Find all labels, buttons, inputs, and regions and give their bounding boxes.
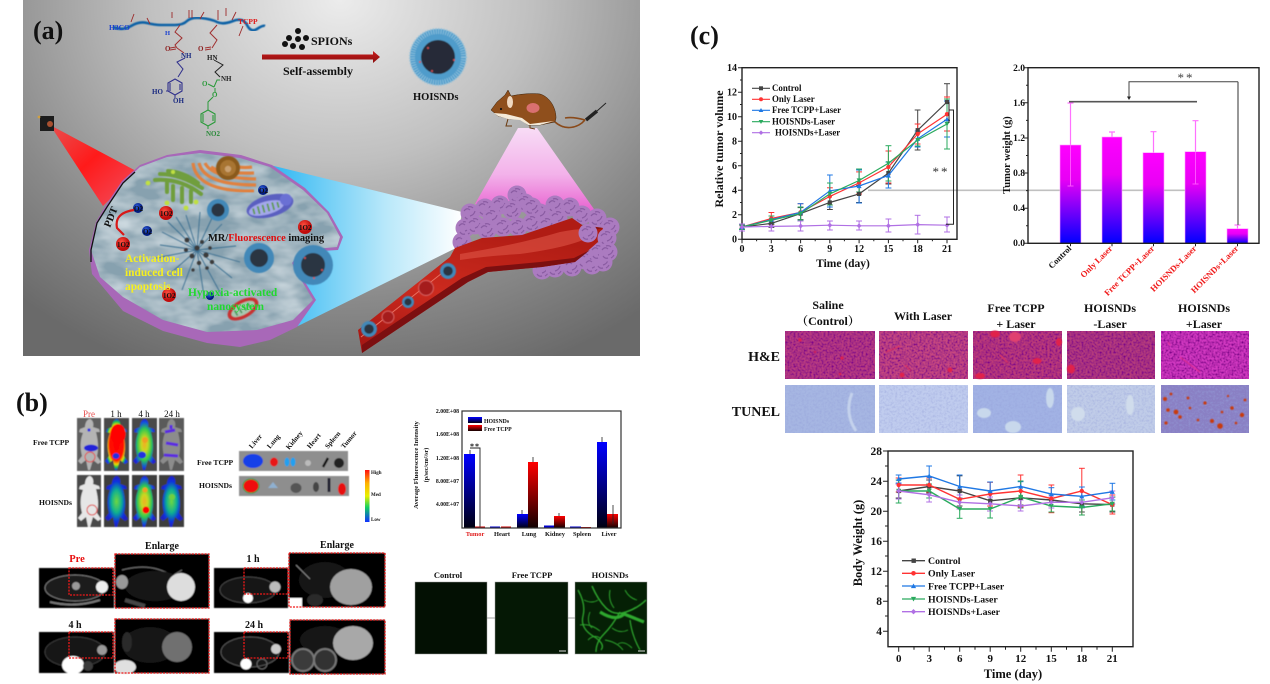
polymer structure: HN: [207, 54, 218, 62]
polymer structure: HO: [152, 88, 163, 96]
hypoxia label: Hypoxia-activated: [188, 287, 278, 299]
x tick labels: Liver: [602, 531, 617, 538]
significance bracket: **: [932, 164, 950, 179]
x axis title: Time (day): [816, 258, 870, 270]
bars: [1060, 137, 1248, 243]
y tick labels: 8: [732, 136, 737, 148]
dashed boxes Pre: [69, 554, 209, 608]
y tick labels: 0.0: [1013, 239, 1025, 249]
y tick labels: [727, 63, 737, 246]
blue light beam: [270, 165, 462, 328]
legend: Free TCPP+Laser: [772, 105, 841, 115]
confocal HOISNDs: [575, 570, 647, 654]
y tick labels: 1.2: [1013, 134, 1025, 144]
line chart: body weight: [851, 446, 1133, 681]
dashed boxes 1 h: [244, 553, 385, 607]
MR images row 1 left: [39, 541, 209, 608]
y tick labels: 10: [727, 112, 737, 123]
panel a background: [23, 0, 640, 356]
y tick labels: 8.00E+07: [436, 479, 459, 485]
icon: SPIONs dots: [282, 28, 309, 50]
legend: [468, 417, 512, 433]
icon: syringe: [586, 103, 606, 120]
dashed boxes 24 h: [244, 620, 385, 674]
x tick labels: Heart: [494, 531, 511, 538]
apoptosis label: [125, 253, 183, 293]
ex vivo label HOISNDs: HOISNDs: [199, 481, 232, 490]
H&amp;E micrographs: [785, 330, 1249, 379]
histology column headings: + Laser: [996, 317, 1036, 331]
bar chart: fluorescence intensity: [413, 409, 621, 538]
polymer structure: NO2: [206, 130, 220, 138]
x tick labels: [466, 531, 617, 538]
label 24 h: 24 h: [245, 620, 263, 631]
organelle: mitochondrion: [244, 189, 296, 223]
label (b): (b): [16, 388, 48, 417]
error bars: [742, 84, 947, 234]
histology column headings: （Control）: [796, 314, 860, 328]
nanoparticle cluster with fibres: [156, 212, 240, 296]
y axis title: (p/sec/cm²/sr): [423, 448, 430, 482]
polymer structure: NH: [181, 52, 192, 60]
histology column headings: [796, 298, 1230, 331]
significance bracket: [470, 442, 480, 527]
line chart: relative tumor volume: [712, 63, 957, 270]
watermark line across charts: [868, 189, 1185, 191]
significance bracket: [932, 102, 954, 224]
MR images row 2 left: [39, 619, 209, 674]
y tick labels: [870, 446, 882, 638]
y tick labels: 24: [870, 476, 882, 488]
histology column headings: HOISNDs: [1178, 301, 1230, 315]
apoptosis label: apoptosis: [125, 281, 171, 293]
legend: HOISNDs-Laser: [772, 116, 835, 126]
plot frame: [888, 451, 1133, 647]
error bars: [899, 466, 1112, 518]
confocal Control: Control: [434, 570, 463, 580]
significance bracket: **: [470, 442, 480, 451]
x tick labels: Control: [1046, 243, 1074, 271]
x tick labels: Tumor: [466, 531, 484, 538]
TUNEL micrographs: [785, 385, 1249, 433]
plot frame: [1028, 68, 1259, 243]
y tick labels: 16: [870, 536, 882, 548]
organelle: red mitochondrion: [224, 293, 262, 325]
arrow: self-assembly: [262, 51, 380, 63]
apoptosis label: Activation-: [125, 253, 180, 265]
histology column headings: +Laser: [1186, 317, 1223, 331]
y tick labels: 0: [732, 235, 737, 246]
organelle: golgi: [193, 163, 256, 191]
time labels: 24 h: [164, 409, 180, 419]
y tick labels: [1013, 64, 1025, 249]
singlet oxygen and oxygen spheres: 1O2: [163, 292, 176, 300]
legend: HOISNDs+Laser: [775, 127, 840, 137]
y tick labels: 8: [876, 596, 882, 608]
polymer structure: O: [212, 91, 218, 99]
cell cytoplasm: [91, 153, 340, 332]
panel a: schematic illustration: [23, 0, 640, 356]
y axis title: Tumor weight (g): [1002, 116, 1013, 194]
y tick labels: 0.4: [1013, 204, 1025, 214]
watermark line: [487, 617, 575, 619]
polymer structure: OH: [173, 97, 184, 105]
MR axial 1 h: [214, 568, 288, 608]
dark edge: [91, 172, 135, 262]
x tick labels: Kidney: [545, 531, 566, 538]
legend: [902, 556, 1005, 618]
x tick labels: 18: [1076, 653, 1088, 665]
PDT arrow: [117, 210, 134, 235]
legend: Only Laser: [772, 94, 815, 104]
time labels: Pre: [83, 409, 95, 419]
label (c): (c): [690, 21, 719, 50]
time labels: 1 h: [110, 409, 122, 419]
polymer structure: O: [198, 45, 204, 53]
organ labels: Lung: [265, 433, 282, 450]
ex vivo organ images: [239, 451, 349, 496]
y tick labels: 1.6: [1013, 99, 1025, 109]
MR images row 2 right: [214, 620, 385, 674]
error bars: [470, 437, 613, 524]
y axis title: Body Weight (g): [851, 500, 865, 586]
ticks: [1024, 68, 1238, 246]
organ labels: Kidney: [284, 429, 305, 451]
polymer structure: TCPP: [238, 17, 258, 26]
y tick labels: [436, 409, 459, 508]
x tick labels: 12: [854, 244, 864, 255]
singlet oxygen and oxygen spheres: O2: [143, 228, 152, 236]
MR enlarge 1 h: [289, 553, 385, 607]
x tick labels: Spleen: [573, 531, 591, 538]
MR images row 1 right: [214, 540, 385, 608]
colour scale: [365, 470, 382, 523]
label 1 h: 1 h: [246, 554, 260, 565]
polymer structure: O: [165, 45, 171, 53]
MR enlarge Pre: [115, 554, 209, 608]
y tick labels: 12: [870, 566, 882, 578]
x tick labels: 9: [987, 653, 993, 665]
y axis title: [413, 420, 430, 509]
legend: HOISNDs+Laser: [928, 607, 1001, 618]
significance lines: [1069, 70, 1238, 225]
y tick labels: 12: [727, 88, 737, 98]
histology column headings: HOISNDs: [1084, 301, 1136, 315]
polymer structure: [109, 8, 265, 138]
x tick labels: 12: [1015, 653, 1027, 665]
MR axial Pre: [39, 568, 114, 608]
dashed boxes 4 h: [69, 619, 209, 673]
panel c: therapy results: [690, 21, 1259, 681]
legend: Only Laser: [928, 569, 976, 580]
bars: [464, 442, 618, 528]
x tick labels: 21: [942, 244, 952, 255]
Self-assembly label: Self-assembly: [283, 64, 353, 78]
icon: HOISNDs nanoparticle: [410, 29, 466, 85]
y axis title: Average Fluorescence Intensity: [413, 420, 420, 509]
singlet oxygen and oxygen spheres: O2: [134, 205, 143, 213]
organ labels: Liver: [247, 433, 264, 450]
x tick labels: 3: [926, 653, 932, 665]
nanoparticle entering cell: [293, 245, 333, 285]
red laser beam: [50, 125, 138, 206]
y tick labels: 2: [732, 210, 737, 221]
MR enlarge 4 h: [114, 619, 209, 674]
y tick labels: 28: [870, 446, 882, 458]
tumor cluster in front: [578, 224, 618, 262]
nanoparticles and cells in vessel: [361, 263, 456, 337]
ex vivo label Free TCPP: Free TCPP: [197, 458, 234, 467]
polymer structure: H3CO: [109, 23, 130, 32]
colour scale: Low: [371, 518, 381, 523]
label Enlarge left: Enlarge: [145, 541, 180, 552]
legend: Control: [772, 83, 802, 93]
MR axial 24 h: [214, 632, 289, 673]
x tick labels: 3: [769, 244, 774, 255]
histology column headings: -Laser: [1093, 317, 1127, 331]
singlet oxygen and oxygen spheres: 1O2: [299, 224, 312, 232]
data lines: [899, 476, 1112, 509]
histology column headings: Saline: [812, 298, 844, 312]
x tick labels: 0: [740, 244, 744, 255]
hypoxia label: nanosystem: [207, 301, 264, 313]
histology column headings: With Laser: [894, 309, 953, 323]
label 4 h: 4 h: [68, 620, 82, 631]
y tick labels: 4: [732, 186, 737, 197]
HOISNDs label: HOISNDs: [413, 92, 459, 103]
x tick labels: 15: [883, 244, 893, 255]
organ labels: Spleen: [323, 430, 342, 450]
organ labels: Tumor: [339, 430, 359, 450]
y tick labels: 4: [876, 626, 882, 638]
polymer structure: O: [202, 80, 208, 88]
legend: Control: [928, 556, 961, 567]
y tick labels: 4.00E+07: [436, 502, 459, 508]
lower error whiskers: [1068, 145, 1198, 186]
y tick labels: 1.60E+08: [436, 432, 459, 438]
plot frame: [462, 411, 621, 528]
x tick labels: 15: [1046, 653, 1057, 665]
upper error whiskers: [1068, 103, 1240, 229]
confocal Free TCPP: [495, 570, 568, 654]
row label H&amp;E: H&E: [748, 350, 780, 365]
singlet oxygen and oxygen spheres: 1O2: [160, 210, 173, 218]
hypoxia label: [188, 287, 278, 313]
x axis title: Time (day): [984, 667, 1042, 681]
x tick labels: 6: [957, 653, 963, 665]
colour scale: Med: [371, 493, 381, 498]
x tick labels: HOISNDs-Laser: [1148, 243, 1199, 294]
legend: HOISNDs-Laser: [928, 594, 998, 605]
legend: HOISNDs: [484, 419, 510, 425]
time labels: 4 h: [138, 409, 150, 419]
label HOISNDs: HOISNDs: [39, 498, 72, 507]
singlet oxygen and oxygen spheres: [116, 185, 312, 302]
y tick labels: 2.00E+08: [436, 409, 459, 415]
organ labels: Heart: [305, 431, 323, 450]
x tick labels: 18: [913, 244, 923, 255]
x tick labels: [740, 244, 952, 255]
organ labels: [247, 429, 359, 451]
y tick labels: 0.8: [1013, 169, 1025, 179]
time labels: [83, 409, 180, 419]
fluorescence mouse images: [77, 418, 184, 527]
MR enlarge 24 h: [290, 620, 385, 674]
confocal HOISNDs: HOISNDs: [592, 570, 629, 580]
x tick labels: 6: [798, 244, 803, 255]
ticks: [738, 68, 947, 243]
polymer structure: NH: [221, 75, 232, 83]
data lines: [742, 102, 947, 227]
plot frame: [742, 68, 957, 239]
x tick labels: 0: [896, 653, 902, 665]
ticks: [883, 451, 1112, 652]
significance lines: **: [1178, 70, 1194, 85]
panel b: imaging results: [16, 388, 647, 674]
y tick labels: 2.0: [1013, 64, 1025, 74]
imaging label: MR/Fluorescence imaging: [208, 233, 325, 244]
histology column headings: Free TCPP: [987, 301, 1045, 315]
MR axial 4 h: [39, 632, 114, 674]
singlet oxygen and oxygen spheres: 1O2: [117, 241, 130, 249]
y tick labels: 6: [732, 161, 737, 172]
label Enlarge right: Enlarge: [320, 540, 355, 551]
x tick labels: Only Laser: [1078, 243, 1115, 280]
y axis title: Relative tumor volume: [712, 90, 726, 208]
confocal Control: [415, 570, 487, 654]
label Pre: Pre: [69, 554, 85, 565]
pink light beam: [475, 128, 596, 212]
organelle: nucleus: [216, 156, 240, 180]
bar chart: tumor weight: [1002, 64, 1259, 298]
icon: laser device: [38, 116, 54, 131]
cell: [89, 150, 343, 347]
x tick labels: 9: [827, 244, 832, 255]
y tick labels: 14: [727, 63, 737, 74]
nanoparticles in cell: [207, 199, 274, 273]
apoptosis label: induced cell: [125, 267, 183, 279]
tumor cluster behind vessel: [452, 186, 620, 280]
polymer structure: H: [165, 30, 170, 37]
x tick labels: [1046, 243, 1241, 298]
SPIONs label: SPIONs: [311, 34, 353, 48]
legend: Free TCPP: [484, 427, 512, 433]
organelle: endoplasmic reticulum: [146, 170, 202, 210]
label Free TCPP: Free TCPP: [33, 438, 70, 447]
confocal Free TCPP: Free TCPP: [512, 570, 552, 580]
singlet oxygen and oxygen spheres: O2: [259, 187, 268, 195]
legend: [752, 83, 841, 137]
x tick labels: Free TCPP+Laser: [1102, 243, 1157, 298]
legend: Free TCPP+Laser: [928, 581, 1005, 592]
label (a): (a): [33, 16, 63, 45]
icon: mouse: [491, 90, 585, 129]
y tick labels: 1.20E+08: [436, 456, 459, 462]
blood vessel: [358, 218, 603, 353]
confocal images: [415, 570, 647, 654]
y tick labels: 20: [870, 506, 882, 518]
x tick labels: Lung: [522, 531, 537, 538]
colour scale: High: [371, 471, 382, 476]
x tick labels: HOISNDs+Laser: [1189, 243, 1241, 295]
x tick labels: [896, 653, 1118, 665]
cell membrane: [89, 150, 343, 347]
PDT label: PDT: [103, 206, 121, 229]
x tick labels: 21: [1107, 653, 1118, 665]
row label TUNEL: TUNEL: [732, 405, 780, 420]
